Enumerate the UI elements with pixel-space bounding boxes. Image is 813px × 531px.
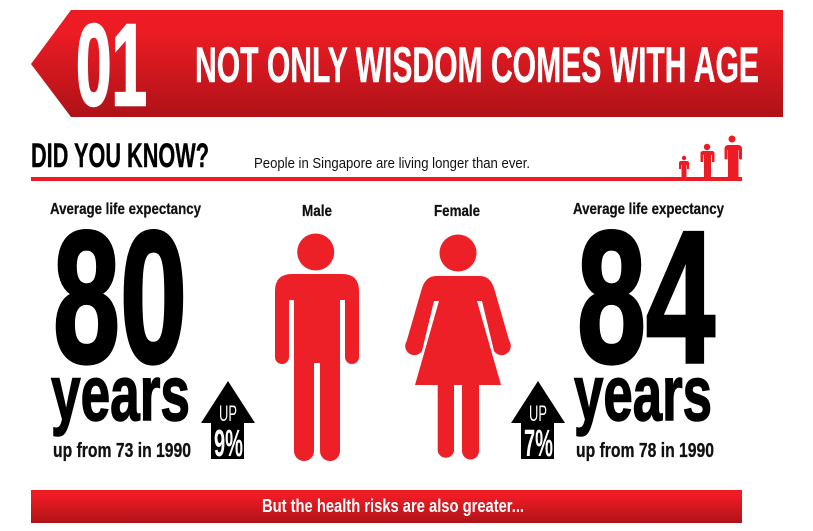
panel: female statistics: [511, 192, 724, 465]
footer text: But the health risks are also greater...: [262, 496, 524, 516]
years: years: [51, 349, 190, 437]
arrow: up 7%: [511, 381, 565, 465]
label: average life expectancy female: Average life expectancy: [573, 201, 724, 218]
section number: 01: [76, 0, 147, 130]
up from 78: up from 78 in 1990: [576, 440, 714, 462]
icon: three growing people: [679, 136, 742, 177]
intro text: People in Singapore are living longer than ever.: [254, 156, 530, 172]
arrow: up 9%: [201, 381, 255, 465]
label: female: Female: [434, 203, 480, 220]
label: average life expectancy male: Average life expectancy: [50, 201, 201, 218]
number: 84: 84: [577, 192, 715, 402]
up from 73: up from 73 in 1990: [53, 440, 191, 462]
panel: male statistics: [50, 192, 255, 465]
arrow: up 9%: UP: [219, 401, 237, 426]
banner: [31, 0, 783, 130]
icon: male figure: [275, 234, 359, 461]
label: male: Male: [302, 203, 332, 220]
arrow: up 7%: 7%: [524, 423, 553, 465]
number: 80: 80: [53, 192, 187, 402]
arrow: up 9%: 9%: [214, 423, 243, 465]
arrow: up 7%: UP: [529, 401, 547, 426]
footer bar: [31, 490, 742, 523]
years: years: [574, 349, 712, 437]
divider: [31, 177, 742, 181]
heading: did you know: DID YOU KNOW?: [31, 137, 209, 175]
icon: female figure: [405, 234, 511, 460]
